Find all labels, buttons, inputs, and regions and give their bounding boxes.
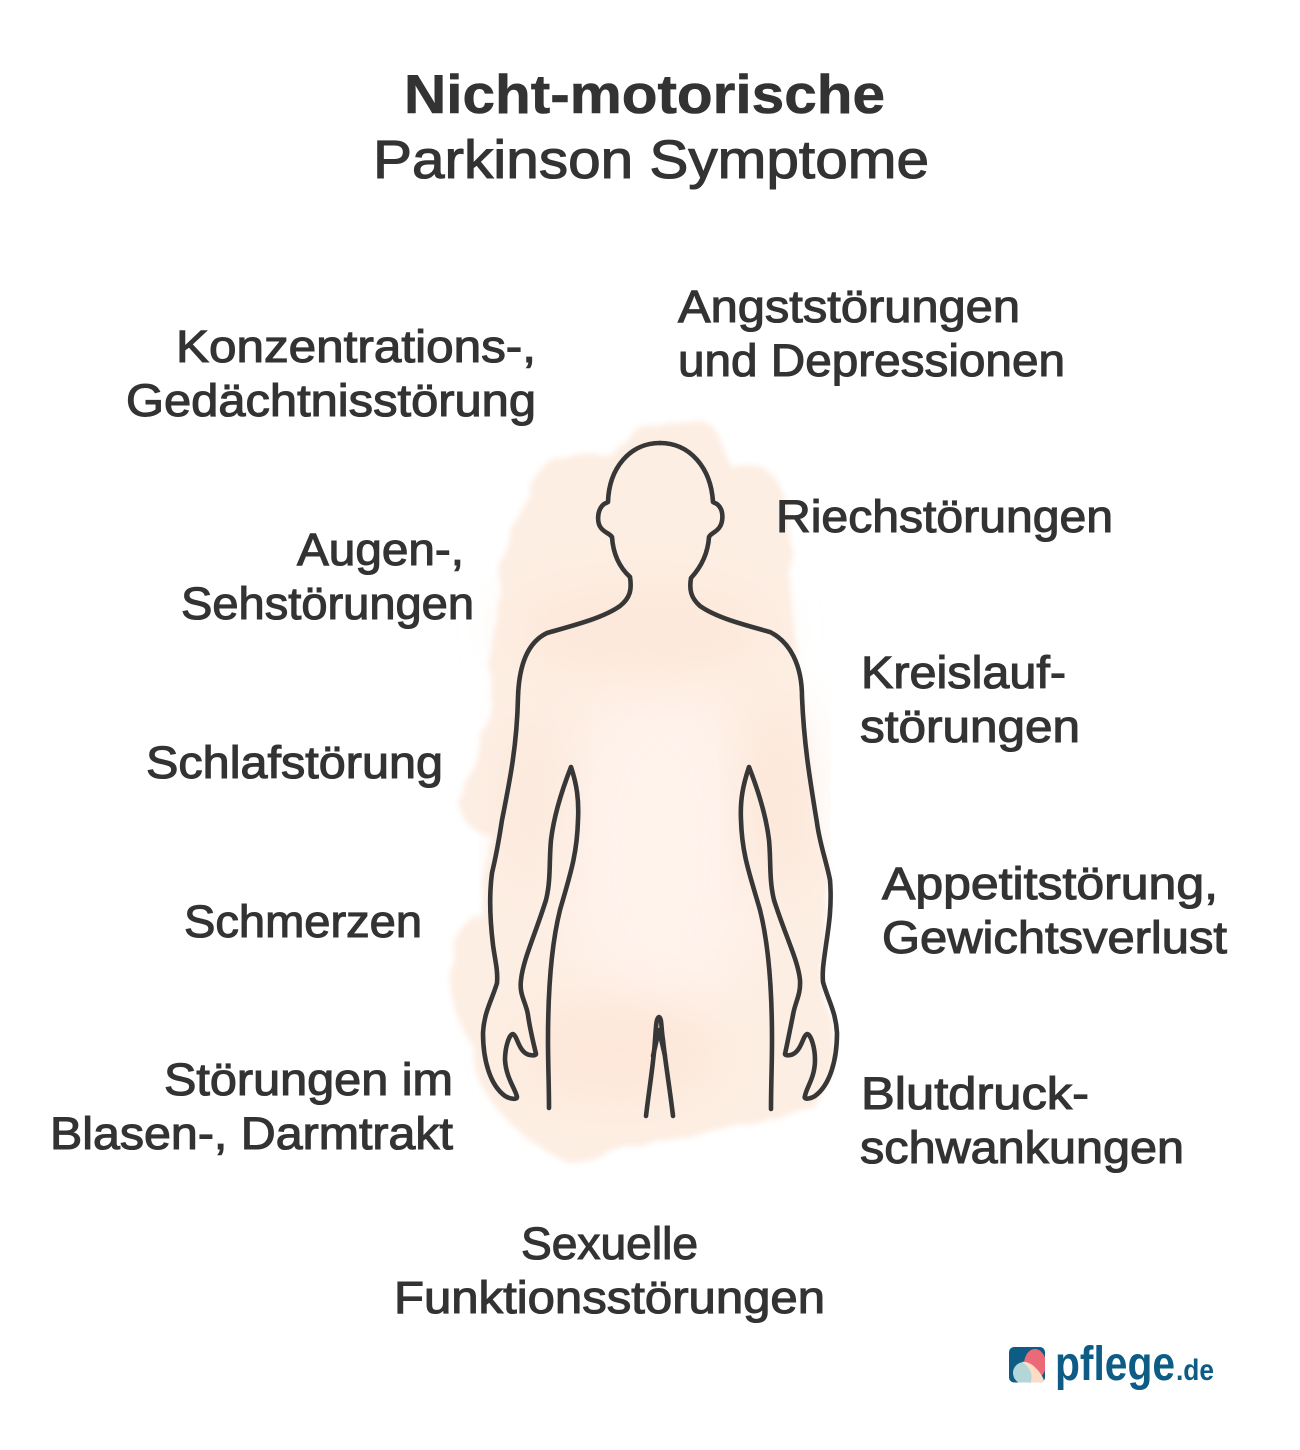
logo: pflege.de bbox=[1009, 1345, 1214, 1390]
label: Angststörungen und Depressionen bbox=[678, 281, 1065, 386]
label: Appetitstörung, Gewichtsverlust bbox=[882, 858, 1228, 963]
left side of body and arm bbox=[483, 443, 660, 1108]
label: Kreislaufstörungen: Kreislauf- bbox=[861, 647, 1066, 698]
logo wordmark: pflege bbox=[1055, 1338, 1175, 1391]
watercolor background blob bbox=[450, 420, 836, 1166]
label: Blutdruckschwankungen bbox=[860, 1068, 1184, 1173]
label: Schmerzen: Schmerzen bbox=[184, 896, 422, 947]
icon: logo mark bbox=[1009, 1347, 1046, 1384]
label: Riechstörungen: Riechstörungen bbox=[776, 491, 1113, 542]
label: Sexuelle Funktionsstörungen: Sexuelle bbox=[521, 1218, 698, 1269]
label: Störungen im Blasen-, Darmtrakt: Blasen-, Darmtrakt bbox=[50, 1108, 454, 1159]
label: Kreislaufstörungen bbox=[860, 647, 1080, 752]
label: Augen-, Sehstörungen: Augen-, bbox=[297, 524, 464, 575]
label: Kreislaufstörungen: störungen bbox=[860, 701, 1080, 752]
label: Augen-, Sehstörungen: Sehstörungen bbox=[181, 578, 474, 629]
label: Sexuelle Funktionsstörungen bbox=[394, 1218, 825, 1323]
label: Störungen im Blasen-, Darmtrakt: Störungen im bbox=[164, 1054, 453, 1105]
label: Sexuelle Funktionsstörungen: Funktionsstörungen bbox=[394, 1272, 825, 1323]
label: Schlafstörung: Schlafstörung bbox=[146, 737, 443, 788]
label: Blutdruckschwankungen: Blutdruck- bbox=[861, 1068, 1089, 1119]
label: Appetitstörung, Gewichtsverlust: Appetitstörung, bbox=[882, 858, 1218, 909]
label: Augen-, Sehstörungen bbox=[181, 524, 474, 629]
title: Nicht-motorische bbox=[404, 63, 885, 125]
crotch line bbox=[646, 1017, 673, 1116]
label: Angststörungen und Depressionen: und Depressionen bbox=[678, 335, 1065, 386]
right side of body and arm bbox=[660, 443, 837, 1109]
title bbox=[373, 63, 929, 190]
label: Konzentrations-, Gedächtnisstörung: Konzentrations-, bbox=[176, 321, 536, 372]
label: Konzentrations-, Gedächtnisstörung bbox=[126, 321, 536, 426]
label: Konzentrations-, Gedächtnisstörung: Gedächtnisstörung bbox=[126, 375, 536, 426]
logo: pflege.de: .de bbox=[1176, 1354, 1214, 1387]
label: Angststörungen und Depressionen: Angststörungen bbox=[678, 281, 1020, 332]
label: Appetitstörung, Gewichtsverlust: Gewichtsverlust bbox=[882, 912, 1228, 963]
body outline bbox=[483, 443, 837, 1116]
label: Blutdruckschwankungen: schwankungen bbox=[860, 1122, 1184, 1173]
label: Störungen im Blasen-, Darmtrakt bbox=[50, 1054, 454, 1159]
title: Parkinson Symptome bbox=[373, 130, 929, 190]
